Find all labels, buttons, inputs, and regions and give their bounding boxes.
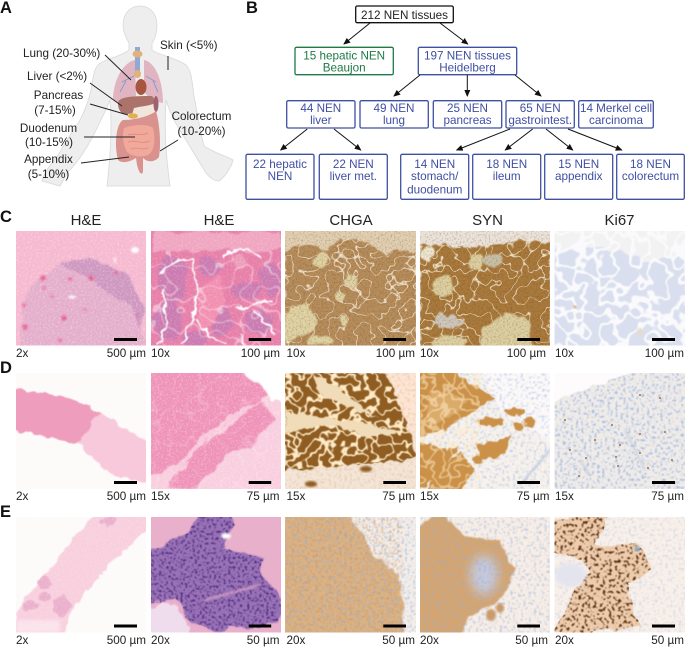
panel B: cohort flowchart xyxy=(246,6,684,199)
box: 25 NEN pancreas: pancreas xyxy=(443,114,492,127)
column heading: H&E: H&E xyxy=(71,212,101,229)
label: liver: Liver (<2%) xyxy=(27,70,87,83)
caption: 500 µm: 500 µm xyxy=(107,634,146,647)
arrow: to colorectum xyxy=(568,129,622,150)
micrograph: D CHGA 15x xyxy=(285,373,416,489)
leader: liver xyxy=(90,83,122,106)
box: 14 NEN stomach/duodenum: stomach/ xyxy=(411,170,459,183)
scale bar xyxy=(383,624,406,628)
caption: 100 µm: 100 µm xyxy=(241,347,280,360)
arrow: to 22 hepatic xyxy=(281,129,307,150)
box: 22 hepatic NEN xyxy=(246,154,314,199)
caption: 500 µm: 500 µm xyxy=(107,490,146,503)
box: 65 NEN gastrointest. xyxy=(506,101,574,128)
box: 25 NEN pancreas xyxy=(433,101,502,128)
colon xyxy=(116,111,160,174)
box: 49 NEN lung: lung xyxy=(383,114,405,127)
box: 197 NEN tissues Heidelberg xyxy=(418,47,517,75)
label: duodenum: (10-15%) xyxy=(25,136,73,149)
box: 65 NEN gastrointest.: 65 NEN xyxy=(520,102,561,115)
caption: 10x: 10x xyxy=(286,347,306,360)
micrograph: E SYN 20x xyxy=(416,514,550,637)
leader: colorectum xyxy=(160,140,178,151)
arrow: to appendix xyxy=(546,129,573,150)
micrograph: C H&E 10x xyxy=(151,231,284,346)
caption: 10x: 10x xyxy=(420,347,439,360)
scale bar xyxy=(383,338,406,341)
lungs xyxy=(113,60,163,103)
arrow: to stomach xyxy=(457,129,510,150)
caption: 15x: 15x xyxy=(286,490,306,503)
caption: 75 µm: 75 µm xyxy=(247,490,280,503)
pancreas xyxy=(128,113,138,119)
leader: pancreas xyxy=(90,104,128,115)
caption: 2x: 2x xyxy=(16,347,29,360)
micrograph: D H&E 15x xyxy=(147,369,285,489)
box: 18 NEN colorectum xyxy=(617,154,684,199)
box: 49 NEN lung xyxy=(360,101,428,128)
box: 49 NEN lung: 49 NEN xyxy=(374,102,414,115)
box: 44 NEN liver: 44 NEN xyxy=(300,102,341,115)
caption: 75 µm: 75 µm xyxy=(517,490,550,503)
micrograph: C Ki67 10x xyxy=(554,231,685,350)
caption: 20x: 20x xyxy=(555,634,574,647)
label: colorectum: (10-20%) xyxy=(177,125,226,138)
box: 44 NEN liver xyxy=(287,101,355,128)
scale bar xyxy=(652,624,675,628)
micrograph: D Ki67 15x xyxy=(550,369,685,489)
caption: 75 µm: 75 µm xyxy=(382,490,415,503)
micrograph: D H&E 2x xyxy=(16,388,146,484)
leader: duodenum xyxy=(84,136,135,138)
box: 18 NEN ileum xyxy=(473,154,541,199)
box: 14 NEN stomach/duodenum: 14 NEN xyxy=(414,158,455,171)
box: 197 NEN tissues Heidelberg: 197 NEN tissues xyxy=(424,50,511,62)
column heading: CHGA: CHGA xyxy=(329,212,373,229)
label: duodenum: Duodenum xyxy=(20,122,77,135)
body silhouette xyxy=(42,6,233,186)
scale bar xyxy=(249,338,271,341)
box: 65 NEN gastrointest.: gastrointest. xyxy=(508,114,572,127)
leader: skin xyxy=(167,56,169,70)
arrow: to gastrointestinal xyxy=(515,75,541,96)
box: 18 NEN colorectum: colorectum xyxy=(622,170,679,183)
box: 14 Merkel cell carcinoma xyxy=(579,101,653,128)
box: 22 NEN liver met. xyxy=(319,154,387,199)
scale bar xyxy=(114,338,137,341)
bronchi xyxy=(120,76,158,92)
box: 212 NEN tissues xyxy=(356,6,453,23)
box: 15 NEN appendix xyxy=(545,154,613,199)
caption: 2x: 2x xyxy=(16,634,29,647)
caption: 15x: 15x xyxy=(555,490,574,503)
box: 15 hepatic NEN Beaujon: Beaujon xyxy=(323,62,366,74)
scale bar xyxy=(517,338,540,341)
label: appendix: Appendix xyxy=(24,153,73,166)
box: 14 NEN stomach/duodenum xyxy=(401,154,469,199)
caption: 15x: 15x xyxy=(151,490,170,503)
trachea and thyroid xyxy=(135,47,140,71)
box: 44 NEN liver: liver xyxy=(310,114,332,127)
caption: 100 µm: 100 µm xyxy=(645,347,684,360)
caption: 20x: 20x xyxy=(286,634,306,647)
scale bar xyxy=(114,481,137,484)
box: 22 hepatic NEN: 22 hepatic xyxy=(253,158,307,171)
micrograph: C CHGA 10x xyxy=(279,231,416,350)
leader: appendix xyxy=(81,157,129,163)
box: 22 NEN liver met.: 22 NEN xyxy=(333,158,374,171)
label: pancreas: (7-15%) xyxy=(34,104,76,117)
caption: 50 µm: 50 µm xyxy=(382,634,415,647)
arrow: to Beaujon xyxy=(344,23,370,44)
caption: 75 µm: 75 µm xyxy=(651,490,684,503)
micrograph: C H&E 2x xyxy=(16,231,146,348)
box: 14 NEN stomach/duodenum: duodenum xyxy=(407,184,462,196)
caption: 50 µm: 50 µm xyxy=(247,634,280,647)
scale bar xyxy=(652,338,675,341)
box: 15 NEN appendix: 15 NEN xyxy=(558,158,599,171)
micrograph: C SYN 10x xyxy=(420,231,550,350)
panel label E: E xyxy=(0,503,11,521)
caption: 2x: 2x xyxy=(16,490,29,503)
box: 14 Merkel cell carcinoma: carcinoma xyxy=(589,114,643,127)
box: 18 NEN colorectum: 18 NEN xyxy=(630,158,671,171)
micrograph: E H&E 2x xyxy=(16,517,146,632)
caption: 15x: 15x xyxy=(420,490,439,503)
micrograph: E H&E 20x xyxy=(147,514,282,637)
scale bar xyxy=(517,481,540,484)
box: 15 hepatic NEN Beaujon: 15 hepatic NEN xyxy=(303,50,385,62)
arrow: to liver xyxy=(394,75,420,96)
scale bar xyxy=(652,481,675,484)
panel label C: C xyxy=(0,208,12,226)
column heading: SYN: SYN xyxy=(472,212,503,229)
caption: 10x: 10x xyxy=(555,347,574,360)
scale bar xyxy=(249,624,271,628)
caption: 500 µm: 500 µm xyxy=(107,347,146,360)
box: 22 NEN liver met.: liver met. xyxy=(330,170,377,183)
arrow: to 22 liver met xyxy=(334,129,361,150)
panel label D: D xyxy=(0,359,12,377)
box: 197 NEN tissues Heidelberg: Heidelberg xyxy=(439,62,496,74)
panel A: human body anatomy xyxy=(42,6,233,186)
arrow: to ileum xyxy=(505,129,533,150)
heart xyxy=(136,79,146,95)
small intestine xyxy=(123,125,154,156)
caption: 10x: 10x xyxy=(151,347,170,360)
micrograph: D SYN 15x xyxy=(420,373,550,489)
arrow: to lung and pancreas xyxy=(466,75,468,96)
arrow: to Heidelberg xyxy=(440,23,468,44)
box: 15 NEN appendix: appendix xyxy=(555,170,603,183)
micrograph: E CHGA 20x xyxy=(281,513,416,637)
caption: 50 µm: 50 µm xyxy=(651,634,684,647)
box: 212 NEN tissues: 212 NEN tissues xyxy=(361,9,448,22)
liver and stomach xyxy=(118,96,155,114)
label: colorectum: Colorectum xyxy=(172,110,231,123)
caption: 50 µm: 50 µm xyxy=(515,634,548,647)
caption: 20x: 20x xyxy=(151,634,170,647)
box: 18 NEN ileum: 18 NEN xyxy=(486,158,527,171)
label: pancreas: Pancreas xyxy=(34,89,83,102)
scale bar xyxy=(114,624,137,628)
box: 15 hepatic NEN Beaujon xyxy=(295,47,393,75)
caption: 20x: 20x xyxy=(420,634,439,647)
caption: 100 µm: 100 µm xyxy=(376,347,415,360)
box: 25 NEN pancreas: 25 NEN xyxy=(447,102,488,115)
scale bar xyxy=(517,624,540,628)
box: 14 Merkel cell carcinoma: 14 Merkel cell xyxy=(580,102,652,115)
label: appendix: (5-10%) xyxy=(28,168,69,181)
leader: lung xyxy=(105,55,131,80)
label: skin: Skin (<5%) xyxy=(160,39,218,52)
column heading: H&E: H&E xyxy=(204,212,234,229)
scale bar xyxy=(249,481,271,484)
box: 18 NEN ileum: ileum xyxy=(493,170,521,183)
micrograph: E Ki67 20x xyxy=(551,514,685,636)
scale bar xyxy=(383,481,406,484)
label: lung: Lung (20-30%) xyxy=(23,47,100,60)
column heading: Ki67: Ki67 xyxy=(604,212,635,229)
caption: 100 µm: 100 µm xyxy=(507,347,546,360)
box: 22 hepatic NEN: NEN xyxy=(268,170,292,183)
